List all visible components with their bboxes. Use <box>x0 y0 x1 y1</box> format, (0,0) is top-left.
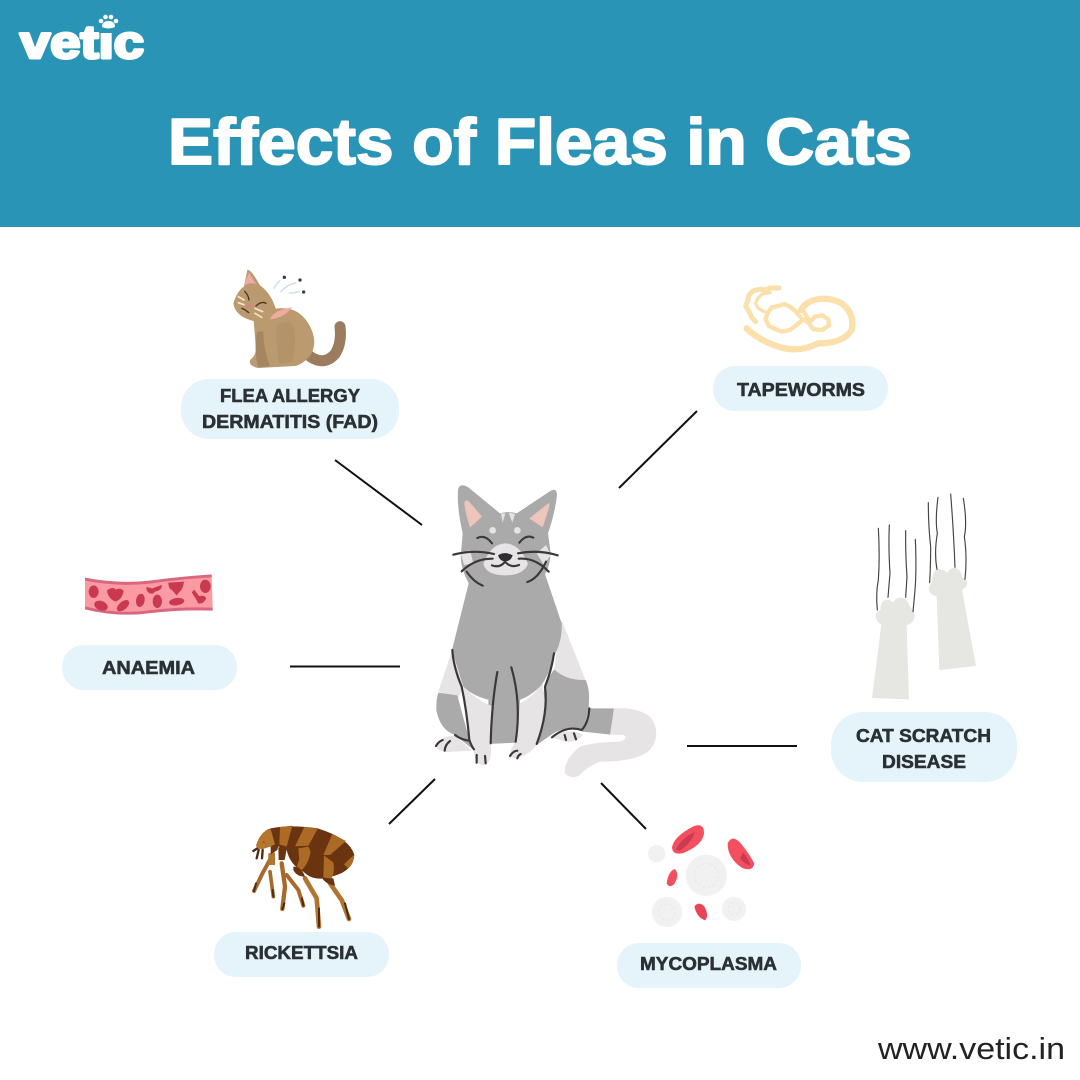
label: tapeworms <box>713 366 888 411</box>
label: rickettsia <box>214 932 389 977</box>
website url: www.vetic.in <box>877 1031 1065 1066</box>
connector lines <box>290 411 797 829</box>
label: tapeworms: TAPEWORMS <box>737 380 865 400</box>
icon: scratching cat <box>233 270 340 368</box>
header banner <box>0 0 1080 227</box>
title: Effects of Fleas in Cats <box>168 105 912 178</box>
logo: vetic: vetic <box>20 16 144 68</box>
panel: rickettsia <box>214 826 389 977</box>
panel: mycoplasma <box>617 825 801 988</box>
label: cat scratch disease: CAT SCRATCH <box>856 726 991 746</box>
panel: cat scratch disease <box>831 494 1017 782</box>
label: flea allergy dermatitis: DERMATITIS (FAD) <box>202 412 378 432</box>
icon: blood cells <box>648 825 754 927</box>
label: anaemia <box>62 645 237 690</box>
label: flea allergy dermatitis <box>181 379 399 439</box>
label: anaemia: ANAEMIA <box>102 658 195 678</box>
panel: tapeworms <box>713 288 888 411</box>
label: cat scratch disease: DISEASE <box>882 752 966 772</box>
label: cat scratch disease <box>831 712 1017 782</box>
label: rickettsia: RICKETTSIA <box>245 943 358 963</box>
central illustration: smiling grey cat <box>435 485 656 777</box>
icon: tapeworm <box>746 288 852 349</box>
label: mycoplasma <box>617 943 801 988</box>
label: mycoplasma: MYCOPLASMA <box>640 954 777 974</box>
icon: scratching paws <box>872 494 976 699</box>
panel: flea allergy dermatitis <box>181 270 399 439</box>
panel: anaemia <box>62 574 237 690</box>
icon: blood vessel <box>85 574 213 615</box>
label: flea allergy dermatitis: FLEA ALLERGY <box>220 386 360 406</box>
icon: flea <box>253 826 354 927</box>
